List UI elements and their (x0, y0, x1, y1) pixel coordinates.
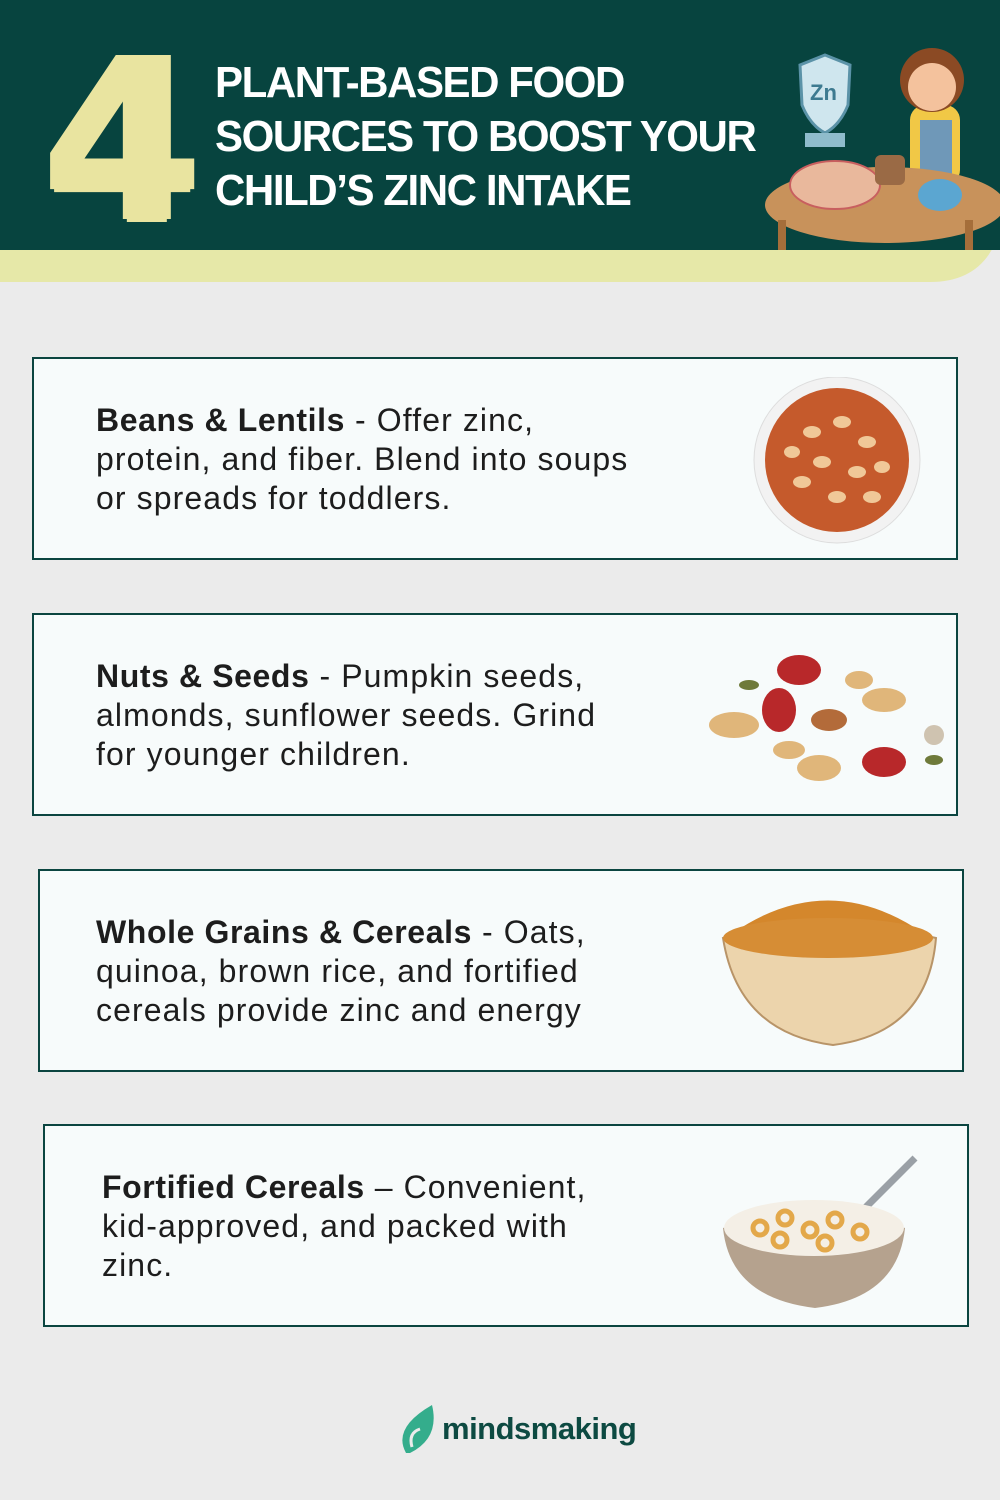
text: beans: or spreads for toddlers. (96, 480, 451, 516)
text: beans (96, 402, 628, 516)
text: nuts: Nuts & Seeds - Pumpkin seeds, (96, 658, 584, 694)
title: PLANT-BASED FOOD (215, 58, 624, 107)
big number 4: 4 (44, 11, 201, 273)
badge: Zn (810, 80, 837, 105)
text: grains: Whole Grains & Cereals - Oats, (96, 914, 586, 950)
icon: leaf (402, 1405, 434, 1453)
title (215, 58, 756, 215)
text: beans: protein, and fiber. Blend into soups (96, 441, 628, 477)
text: grains: quinoa, brown rice, and fortified (96, 953, 579, 989)
badge (800, 55, 850, 147)
text: fortified cereals: zinc. (102, 1247, 173, 1283)
icon: bowl of rice (722, 900, 937, 1046)
text: nuts: for younger children. (96, 736, 411, 772)
panel: beans (32, 357, 958, 560)
child (900, 48, 964, 185)
text: nuts: almonds, sunflower seeds. Grind (96, 697, 596, 733)
text: beans: Beans & Lentils - Offer zinc, (96, 402, 534, 438)
title: SOURCES TO BOOST YOUR (215, 112, 755, 161)
panel: nuts (32, 613, 958, 816)
text: fortified cereals: kid-approved, and packed with (102, 1208, 568, 1244)
header background (0, 0, 1000, 282)
icon: bowl of beans (754, 377, 920, 544)
table (765, 167, 1000, 243)
text: grains (96, 914, 586, 1028)
illustration: child at table (765, 48, 1000, 250)
text: grains: cereals provide zinc and energy (96, 992, 582, 1028)
title: CHILD’S ZINC INTAKE (215, 166, 631, 215)
text: nuts (96, 658, 596, 772)
text: fortified cereals: Fortified Cereals – Convenient, (102, 1169, 586, 1205)
text: fortified cereals (102, 1169, 586, 1283)
icon: nuts and seeds (709, 655, 944, 781)
icon: cereal bowl with spoon (723, 1156, 918, 1308)
panel: fortified cereals (43, 1124, 969, 1327)
logo: mindsmaking: mindsmaking (442, 1411, 636, 1446)
panel: grains (38, 869, 964, 1072)
logo: mindsmaking (402, 1405, 636, 1453)
